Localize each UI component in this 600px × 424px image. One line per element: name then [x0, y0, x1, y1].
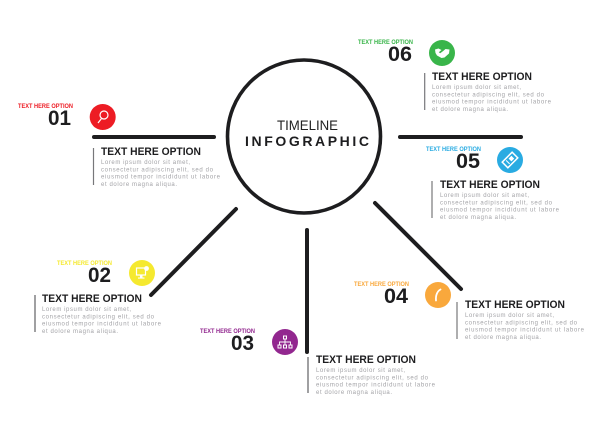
option 02: TEXT HERE OPTION [57, 261, 112, 267]
connector bar 3 [305, 230, 309, 352]
option 02 [35, 260, 162, 335]
option 04: consectetur adipiscing elit, sed do [465, 320, 578, 326]
central circle with title: TIMELINE [277, 117, 338, 133]
option 02: 02 [88, 264, 111, 287]
option 04: et dolore magna aliqua. [465, 335, 541, 341]
option 06: TEXT HERE OPTION [358, 40, 413, 46]
option 06: consectetur adipiscing elit, sed do [432, 92, 545, 98]
option 02: Lorem ipsum dolor sit amet, [42, 307, 131, 313]
option 02: consectetur adipiscing elit, sed do [42, 314, 155, 320]
option 01: Lorem ipsum dolor sit amet, [101, 160, 190, 166]
connector bar 5 [400, 135, 521, 139]
option 06: TEXT HERE OPTION [432, 71, 532, 83]
option 03: Lorem ipsum dolor sit amet, [316, 368, 405, 374]
option 01: consectetur adipiscing elit, sed do [101, 167, 214, 173]
option 02: et dolore magna aliqua. [42, 329, 118, 335]
option 05: Lorem ipsum dolor sit amet, [440, 193, 529, 199]
option 05: et dolore magna aliqua. [440, 215, 516, 221]
option 05: eiusmod tempor incididunt ut labore [440, 208, 560, 214]
option 03: consectetur adipiscing elit, sed do [316, 375, 429, 381]
option 05: consectetur adipiscing elit, sed do [440, 200, 553, 206]
option 06 [358, 40, 552, 113]
option 02: TEXT HERE OPTION [42, 293, 142, 305]
option 03 [200, 329, 436, 396]
option 03: 03 [231, 332, 254, 355]
option 06: Lorem ipsum dolor sit amet, [432, 85, 521, 91]
option 06: et dolore magna aliqua. [432, 107, 508, 113]
option 01: TEXT HERE OPTION [18, 104, 73, 110]
option 01: et dolore magna aliqua. [101, 182, 177, 188]
icon: org chart [272, 329, 298, 355]
option 05: TEXT HERE OPTION [426, 147, 481, 153]
option 01: TEXT HERE OPTION [101, 146, 201, 158]
option 06: eiusmod tempor incididunt ut labore [432, 100, 552, 106]
icon: handshake [429, 40, 455, 66]
central circle with title [228, 60, 380, 213]
option 04 [354, 282, 585, 341]
option 03: TEXT HERE OPTION [200, 329, 255, 335]
option 04: eiusmod tempor incididunt ut labore [465, 328, 585, 334]
option 01: eiusmod tempor incididunt ut labore [101, 175, 221, 181]
icon: ticket [497, 147, 523, 173]
icon: phone [425, 282, 451, 308]
option 04: Lorem ipsum dolor sit amet, [465, 313, 554, 319]
icon: monitor [129, 260, 155, 286]
option 05: 05 [456, 150, 480, 173]
connector bar 2 [151, 209, 236, 295]
connector bar 4 [375, 203, 461, 289]
option 04: 04 [384, 285, 408, 308]
icon: magnifier [90, 104, 116, 130]
option 04: TEXT HERE OPTION [465, 299, 565, 311]
central circle with title: INFOGRAPHIC [245, 133, 369, 149]
connector bar 1 [94, 135, 214, 139]
option 02: eiusmod tempor incididunt ut labore [42, 322, 162, 328]
option 03: eiusmod tempor incididunt ut labore [316, 383, 436, 389]
option 03: TEXT HERE OPTION [316, 354, 416, 366]
option 03: et dolore magna aliqua. [316, 390, 392, 396]
option 01 [18, 104, 221, 188]
option 01: 01 [48, 107, 71, 130]
option 05: TEXT HERE OPTION [440, 179, 540, 191]
option 04: TEXT HERE OPTION [354, 282, 409, 288]
option 06: 06 [388, 43, 412, 66]
option 05 [426, 147, 560, 221]
